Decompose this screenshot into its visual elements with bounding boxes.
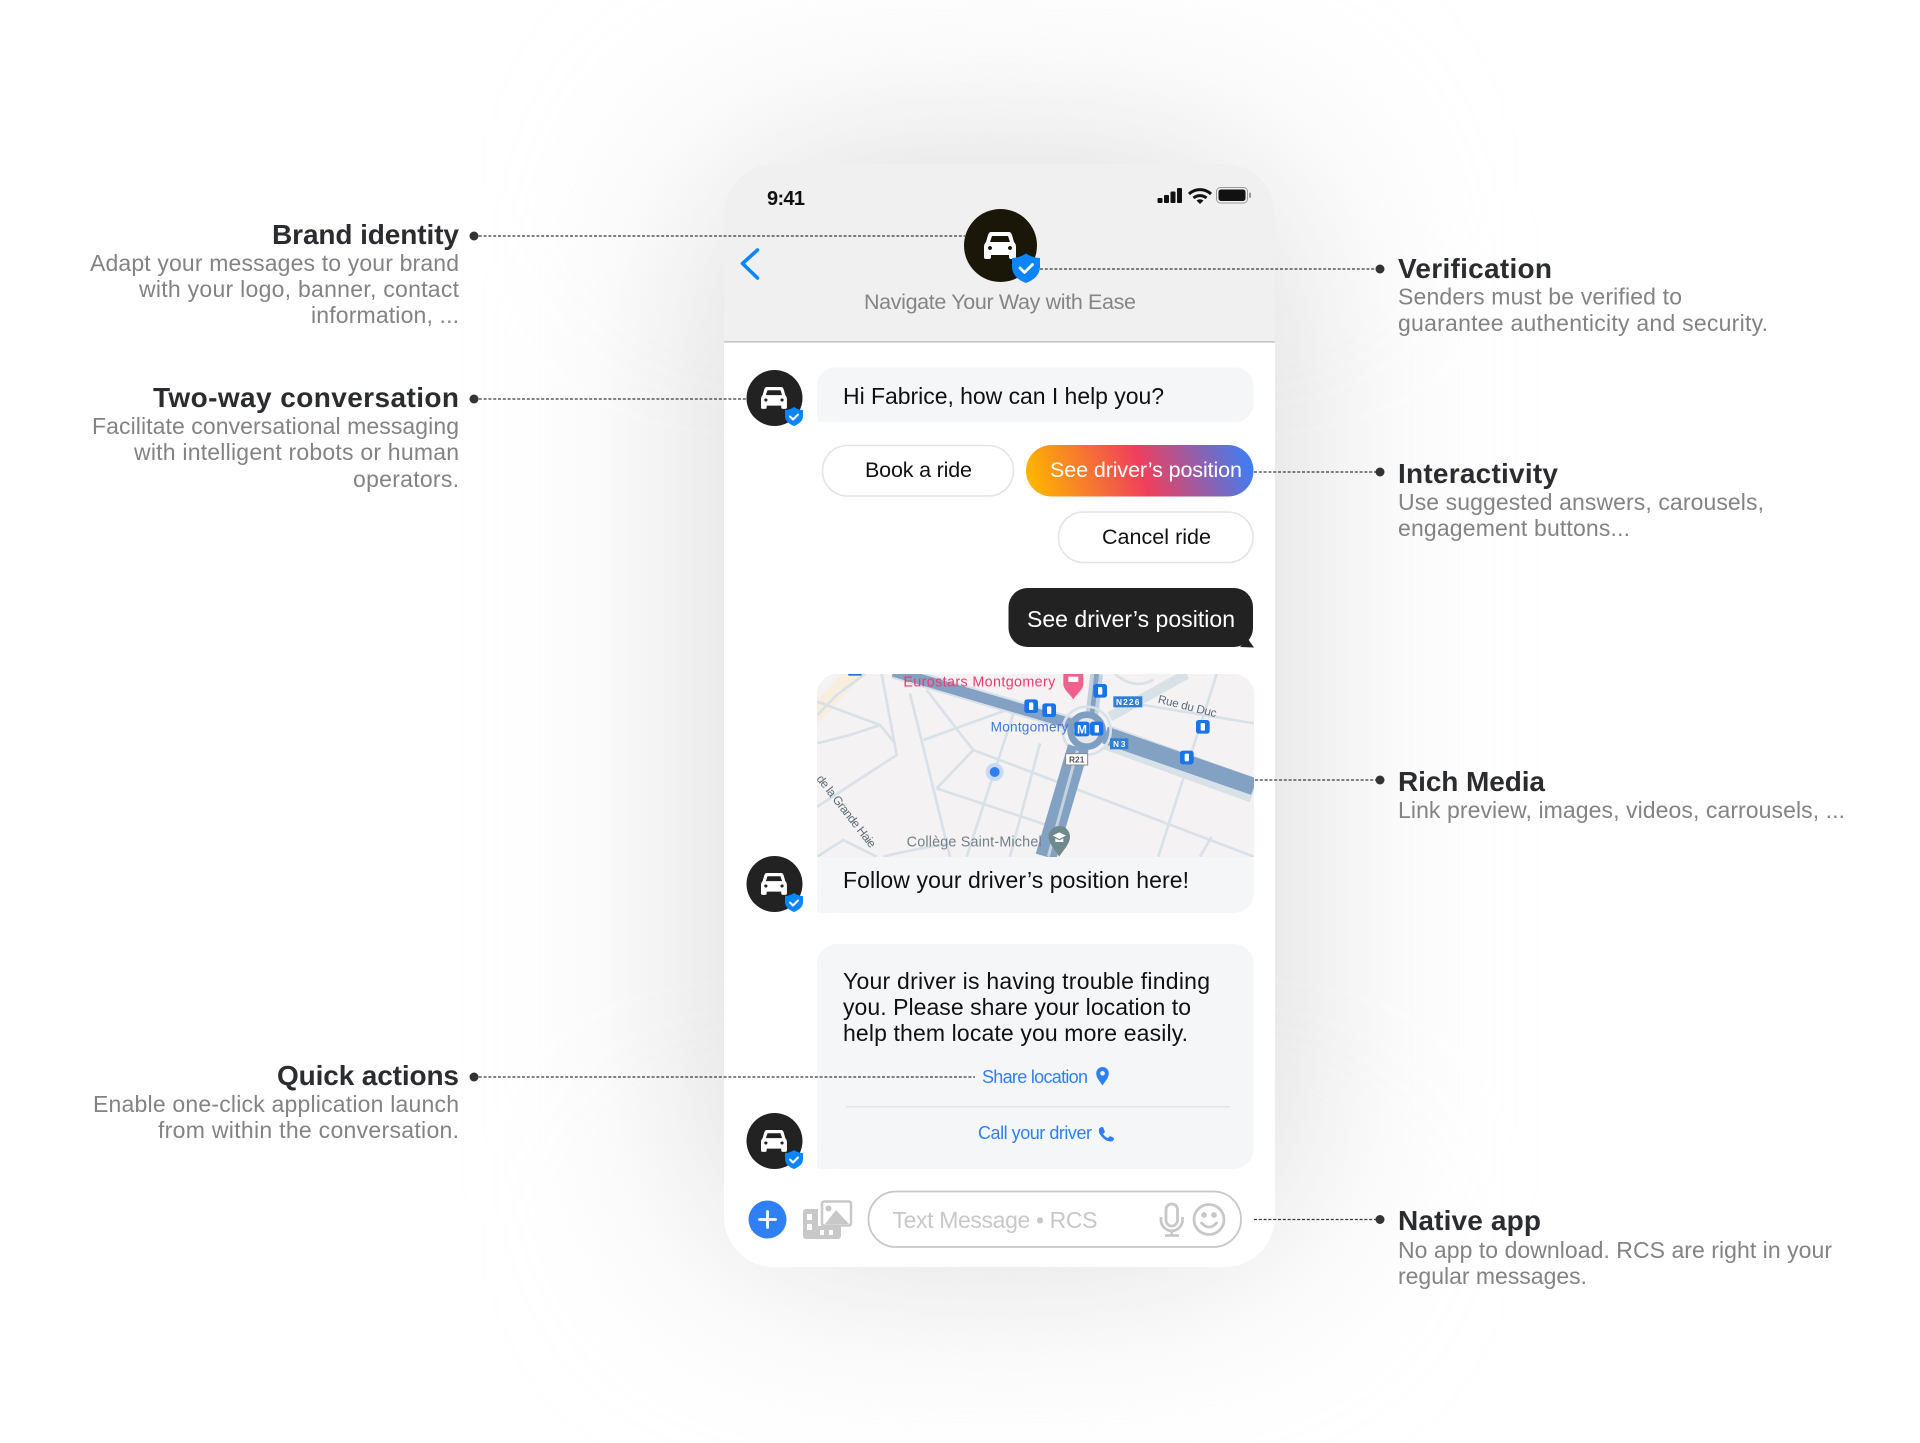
- callout: two-way conversation: with intelligent robots or human: [133, 439, 459, 465]
- user message bubble: See driver’s position: [1027, 606, 1235, 632]
- callout: brand identity: Adapt your messages to your brand: [90, 250, 459, 276]
- message card with quick actions: [817, 944, 1254, 1169]
- message input field: Text Message • RCS: [892, 1207, 1098, 1233]
- map image: N3: [1113, 739, 1126, 749]
- callout: quick actions: [93, 1060, 459, 1143]
- connector: two-way conversation: [470, 394, 746, 404]
- connector: brand identity: [470, 232, 965, 240]
- hotel label: Eurostars Montgomery: [903, 675, 1056, 691]
- connector: interactivity: [1254, 468, 1384, 476]
- status time: 9:41: [767, 188, 805, 210]
- map image: R21: [1069, 754, 1085, 764]
- callout: native app: [1398, 1205, 1832, 1289]
- phone mockup: [724, 164, 1275, 1267]
- callout: verification: guarantee authenticity and security.: [1398, 310, 1768, 336]
- callout: interactivity: Interactivity: [1398, 458, 1558, 489]
- map image: Rue du Duc: [1157, 693, 1218, 720]
- callout: quick actions: Enable one-click application launch: [93, 1091, 459, 1117]
- callout: rich media: Rich Media: [1398, 766, 1545, 797]
- connector: native app: [1254, 1215, 1384, 1224]
- status icons: [1158, 188, 1251, 204]
- school label: Collège Saint-Michel: [907, 835, 1042, 851]
- callout: native app: Native app: [1398, 1205, 1541, 1236]
- phone header: [724, 164, 1275, 343]
- emoji icon: [1194, 1204, 1224, 1234]
- callout: two-way conversation: [92, 382, 459, 492]
- avatar: first message: [746, 370, 803, 426]
- map image: N226: [1116, 697, 1140, 707]
- callout: brand identity: [90, 219, 460, 328]
- back chevron: [742, 250, 758, 278]
- rich media card: [814, 671, 1254, 913]
- map caption: Follow your driver’s position here!: [843, 867, 1189, 893]
- connector: rich media: [1255, 776, 1384, 784]
- callout: native app: No app to download. RCS are right in your: [1398, 1237, 1832, 1263]
- callout: two-way conversation: operators.: [353, 466, 459, 492]
- callout: verification: [1398, 253, 1768, 336]
- connector: verification: [1040, 264, 1384, 274]
- callout: interactivity: engagement buttons...: [1398, 515, 1630, 541]
- callout: two-way conversation: Two-way conversation: [153, 382, 459, 413]
- callout: two-way conversation: Facilitate conversational messaging: [92, 413, 459, 439]
- call driver action: Call your driver: [978, 1123, 1092, 1143]
- callout: brand identity: with your logo, banner, contact: [138, 276, 460, 302]
- callout: quick actions: from within the conversation.: [158, 1117, 459, 1143]
- gallery icon: [803, 1202, 851, 1239]
- suggested reply: cancel ride: Cancel ride: [1102, 525, 1211, 549]
- callout: verification: Verification: [1398, 253, 1552, 284]
- callout: rich media: Link preview, images, videos, carrousels, ...: [1398, 797, 1845, 823]
- map image: M: [1077, 722, 1087, 736]
- suggested reply: book a ride: Book a ride: [865, 458, 972, 482]
- message bubble: greeting: Hi Fabrice, how can I help you?: [843, 383, 1164, 409]
- share location action: Share location: [982, 1067, 1088, 1087]
- background shadow glow: [724, 175, 1275, 1240]
- mic icon: [1161, 1204, 1182, 1236]
- suggested reply: book a ride: [822, 446, 1014, 496]
- user message bubble: [1008, 588, 1254, 648]
- callout: native app: regular messages.: [1398, 1263, 1587, 1289]
- message bubble: greeting: [817, 368, 1254, 422]
- plus button: [748, 1200, 786, 1238]
- suggested reply: see driver's position: [1026, 445, 1254, 496]
- message card with quick actions: help them locate you more easily.: [843, 1020, 1188, 1046]
- callout: brand identity: Brand identity: [272, 219, 459, 250]
- map image: [814, 671, 1254, 857]
- message input field: [868, 1192, 1241, 1247]
- callout: brand identity: information, ...: [311, 302, 459, 328]
- brand avatar: [964, 209, 1040, 283]
- station label: Montgomery: [991, 720, 1069, 735]
- callout: rich media: [1398, 766, 1845, 823]
- map image: de la Grande Haie: [814, 772, 879, 851]
- callout: quick actions: Quick actions: [277, 1060, 459, 1091]
- suggested reply: cancel ride: [1058, 512, 1253, 562]
- connector: quick actions: [470, 1072, 975, 1082]
- callout: interactivity: Use suggested answers, carousels,: [1398, 489, 1764, 515]
- message card with quick actions: you. Please share your location to: [843, 994, 1191, 1020]
- suggested reply: see driver's position: See driver’s position: [1050, 458, 1242, 482]
- callout: interactivity: [1398, 458, 1764, 541]
- avatar: map message: [746, 856, 803, 912]
- brand tagline: Navigate Your Way with Ease: [864, 290, 1136, 314]
- callout: verification: Senders must be verified to: [1398, 284, 1682, 310]
- avatar: quick actions message: [746, 1113, 803, 1169]
- message card with quick actions: Your driver is having trouble finding: [843, 968, 1210, 994]
